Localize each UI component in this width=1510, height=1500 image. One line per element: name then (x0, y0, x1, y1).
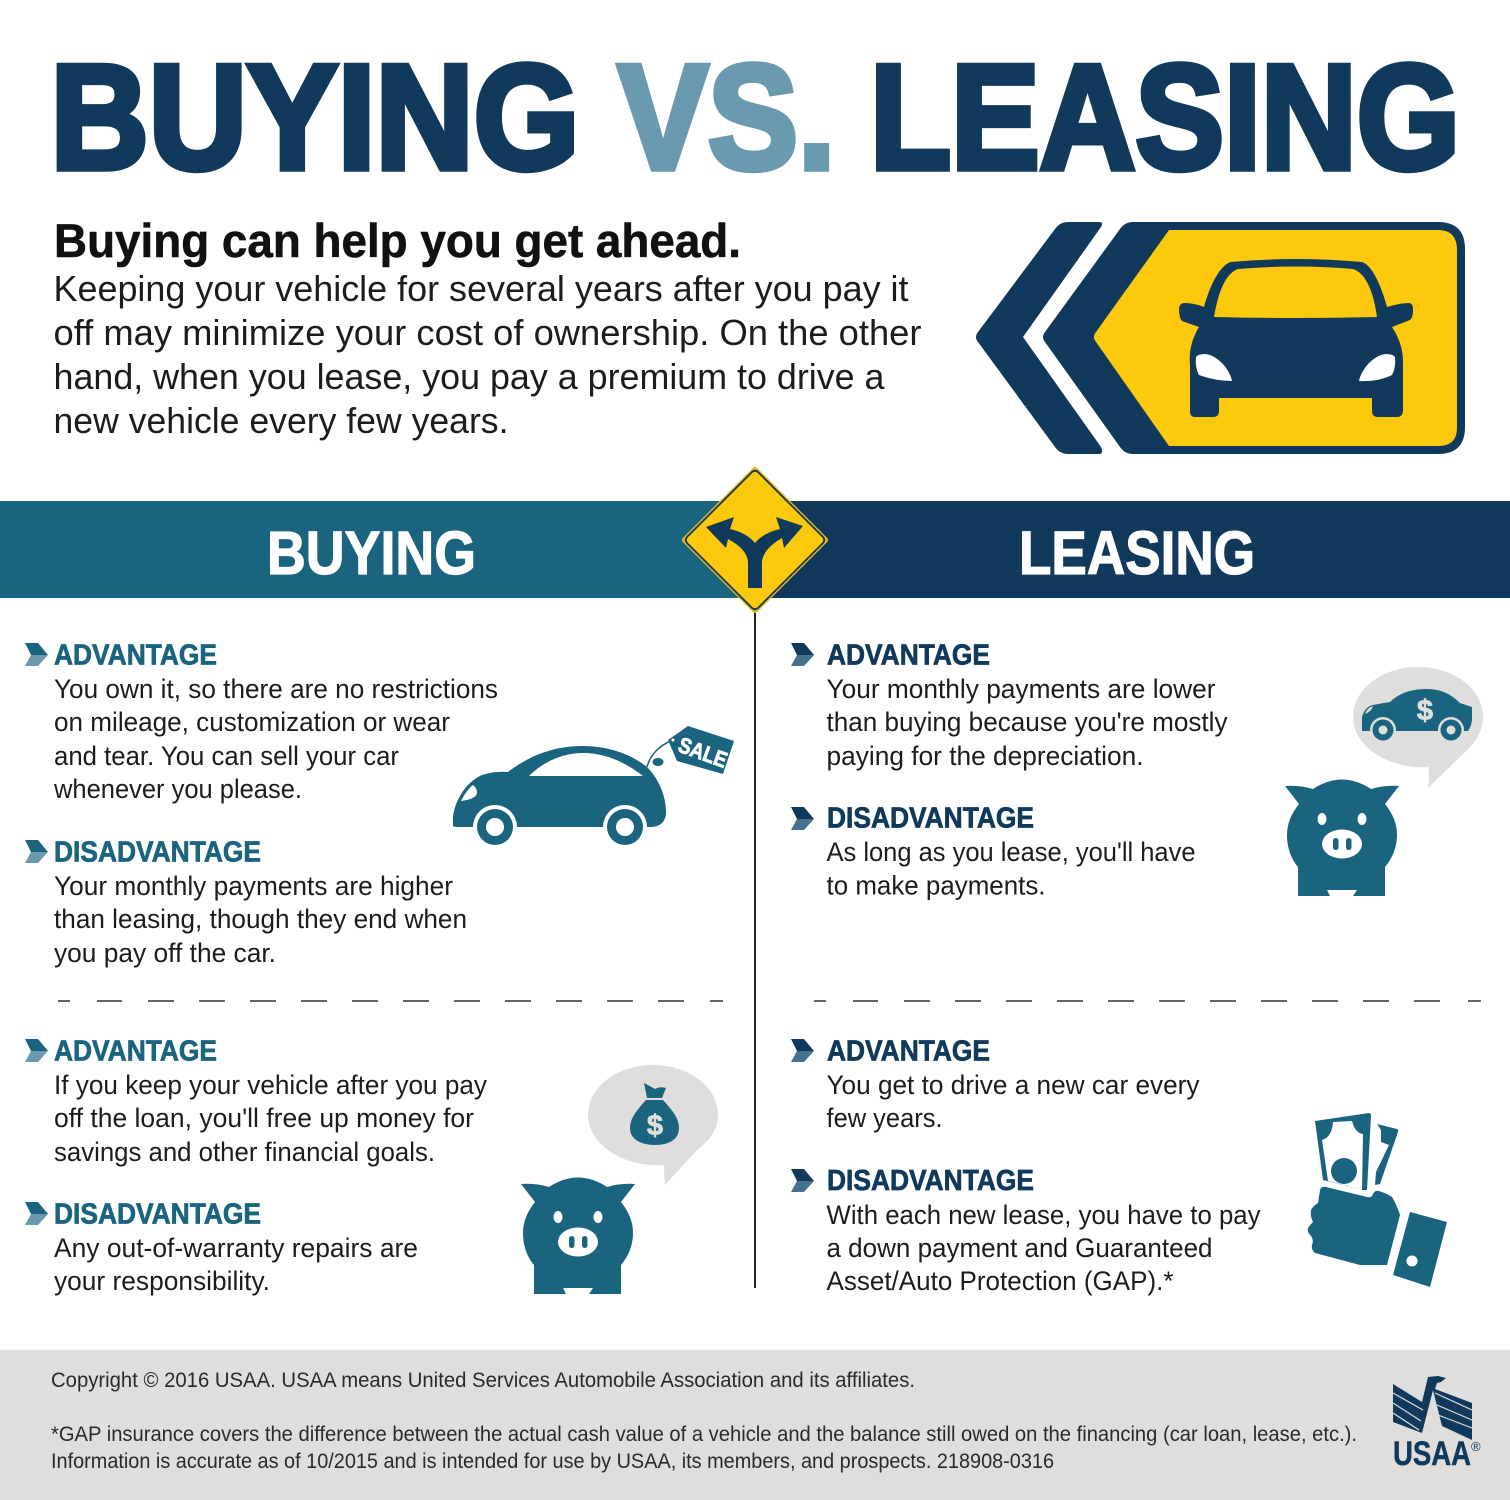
advantage text: and tear. You can sell your car (54, 741, 399, 771)
title: VS. (618, 34, 836, 200)
advantage heading: ADVANTAGE (827, 640, 990, 672)
disadvantage heading: DISADVANTAGE (827, 1165, 1034, 1197)
USAA wordmark: USAA (1393, 1435, 1471, 1473)
icon: chevron (791, 1169, 814, 1192)
advantage text: You get to drive a new car every (826, 1070, 1200, 1100)
disadvantage text: you pay off the car. (54, 938, 276, 968)
disadvantage text: than leasing, though they end when (54, 904, 467, 934)
advantage text (826, 674, 1228, 771)
advantage text: few years. (826, 1103, 942, 1133)
icon: chevron (791, 807, 814, 830)
band: leasing (755, 501, 1510, 598)
panel: leasing group 1 (791, 640, 1228, 900)
leasing heading: LEASING (1019, 519, 1255, 587)
registered mark: ® (1471, 1439, 1481, 1454)
center divider line (754, 612, 756, 1288)
icon: speech bubble with car (1353, 667, 1483, 788)
intro text block (54, 214, 922, 441)
disadvantage text: Any out-of-warranty repairs are (54, 1233, 418, 1263)
intro paragraph: hand, when you lease, you pay a premium to drive a (54, 356, 885, 397)
advantage text: If you keep your vehicle after you pay (54, 1070, 488, 1100)
advantage text: savings and other financial goals. (54, 1137, 435, 1167)
disadvantage heading: DISADVANTAGE (54, 836, 261, 868)
icon: car with sale tag (453, 726, 734, 852)
disadvantage text (54, 871, 467, 968)
intro heading: Buying can help you get ahead. (54, 214, 741, 267)
icon: chevron (25, 643, 48, 666)
panel: buying group 2 (25, 1036, 488, 1296)
title (50, 34, 1460, 200)
icon: piggy left (521, 1178, 635, 1294)
advantage heading: ADVANTAGE (54, 1036, 217, 1068)
buying heading: BUYING (267, 519, 476, 587)
disadvantage text: your responsibility. (54, 1266, 270, 1296)
disadvantage heading: DISADVANTAGE (827, 802, 1034, 834)
disclaimer text (51, 1423, 1357, 1473)
advantage heading: ADVANTAGE (827, 1036, 990, 1068)
advantage text: You own it, so there are no restrictions (54, 674, 498, 704)
logo: USAA (1393, 1376, 1481, 1473)
icon: speech bubble with money bag (588, 1065, 718, 1185)
icon: piggy right (1285, 780, 1399, 896)
intro paragraph (54, 268, 922, 441)
disadvantage text: Asset/Auto Protection (GAP).* (826, 1266, 1174, 1296)
icon: chevron (25, 1039, 48, 1062)
intro paragraph: Keeping your vehicle for several years after you pay it (54, 268, 908, 309)
divider: dashed left (58, 1000, 723, 1002)
advantage text (54, 1070, 488, 1167)
panel: leasing group 2 (791, 1036, 1261, 1296)
disadvantage text: a down payment and Guaranteed (826, 1233, 1212, 1263)
sale label: SALE (675, 732, 731, 773)
advantage text: Your monthly payments are lower (826, 674, 1216, 704)
disclaimer text: Information is accurate as of 10/2015 and is intended for use by USAA, its members, and prospects. 218908-0316 (51, 1450, 1054, 1473)
disadvantage text: Your monthly payments are higher (54, 871, 453, 901)
advantage text: on mileage, customization or wear (54, 707, 450, 737)
disadvantage text: With each new lease, you have to pay (826, 1200, 1261, 1230)
advantage text: paying for the depreciation. (826, 741, 1144, 771)
panel: footer (0, 1350, 1510, 1500)
intro paragraph: off may minimize your cost of ownership. On the other (54, 312, 922, 353)
disadvantage heading: DISADVANTAGE (54, 1198, 261, 1230)
disclaimer text: *GAP insurance covers the difference between the actual cash value of a vehicle and the balance still owed on the financing (car loan, lease, etc.). (51, 1423, 1357, 1446)
copyright text: Copyright © 2016 USAA. USAA means United Services Automobile Association and its affiliates. (51, 1369, 915, 1392)
disadvantage text (826, 1200, 1261, 1296)
advantage text (53, 674, 498, 804)
band: buying (0, 501, 756, 598)
advantage text: off the loan, you'll free up money for (54, 1103, 474, 1133)
icon: road sign with car (976, 222, 1465, 454)
icon: chevron (25, 840, 48, 863)
title: BUYING (50, 34, 580, 200)
icon: fork in road sign (685, 470, 825, 610)
advantage text (826, 1070, 1200, 1133)
advantage heading: ADVANTAGE (54, 640, 217, 672)
dollar sign: $ (647, 1110, 663, 1142)
divider: dashed right (814, 1000, 1481, 1002)
icon: hand holding cash (1308, 1113, 1447, 1287)
disadvantage text (54, 1233, 418, 1296)
dollar sign: $ (1417, 695, 1433, 727)
panel: buying group 1 (25, 640, 498, 968)
disadvantage text (826, 837, 1196, 900)
advantage text: whenever you please. (53, 774, 302, 804)
disadvantage text: to make payments. (826, 870, 1046, 900)
intro paragraph: new vehicle every few years. (54, 400, 508, 441)
advantage text: than buying because you're mostly (826, 707, 1228, 737)
disadvantage text: As long as you lease, you'll have (826, 837, 1196, 867)
icon: chevron (25, 1202, 48, 1225)
icon: chevron (791, 1039, 814, 1062)
icon: chevron (791, 643, 814, 666)
